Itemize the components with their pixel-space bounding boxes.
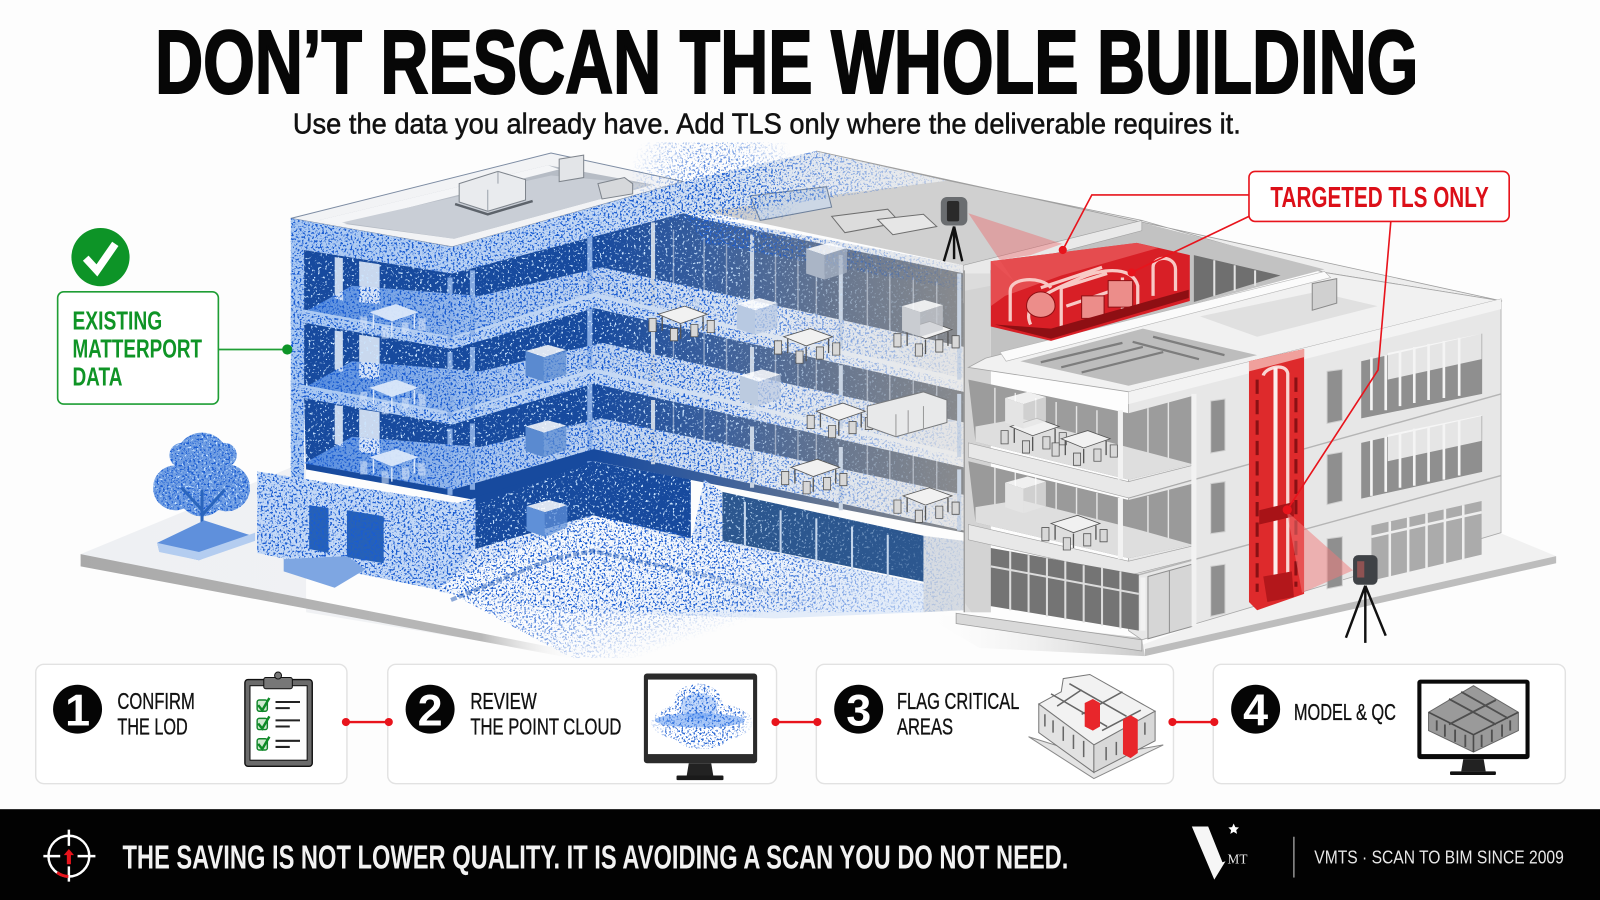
critical zone: red service riser — [1249, 349, 1304, 610]
callout: existing Matterport data — [58, 228, 292, 404]
connector 1-2 — [342, 718, 393, 726]
court wall behind red room — [991, 222, 1324, 357]
leader dots — [1059, 246, 1292, 514]
step 3 card — [816, 664, 1173, 784]
icon: rooftop laser scanner — [941, 197, 967, 261]
glazed ground floor — [991, 548, 1139, 631]
label box: MATTERPORT — [72, 336, 202, 364]
sparse white points on interiors — [296, 204, 969, 592]
window mullions — [673, 230, 937, 504]
balcony floor three — [968, 380, 1193, 480]
scan-to-BIM wing — [816, 151, 1502, 651]
icon: clipboard checklist — [245, 672, 312, 766]
step label: CONFIRM — [117, 688, 195, 714]
step number — [834, 685, 883, 736]
step label: REVIEW — [470, 688, 537, 714]
large windows — [1361, 334, 1482, 581]
step number — [406, 685, 455, 736]
step label: AREAS — [897, 714, 953, 740]
VMT logo — [1192, 823, 1247, 880]
balcony columns — [1120, 394, 1194, 631]
step label: THE LOD — [117, 714, 188, 740]
step 1 card — [36, 664, 347, 784]
slab lines — [1129, 394, 1501, 578]
ground point cloud — [438, 515, 872, 658]
step number: 1 — [65, 685, 90, 736]
plinth — [956, 613, 1142, 651]
balcony furniture — [1001, 392, 1117, 550]
building illustration — [81, 143, 1556, 663]
connector 3-4 — [1168, 718, 1218, 726]
icon: ground laser scanner — [1346, 555, 1386, 643]
tree — [149, 429, 365, 588]
icon: monitor with grey model — [1417, 680, 1530, 775]
connector — [218, 344, 292, 355]
podium and ground floor — [257, 461, 964, 618]
step label: FLAG CRITICAL — [897, 688, 1019, 714]
VMT logo: MT — [1228, 851, 1247, 866]
point-cloud wing: roofs — [291, 151, 1142, 571]
right roof — [968, 272, 1502, 392]
connector 2-3 — [771, 718, 821, 726]
icon: monitor with point cloud — [644, 673, 757, 780]
step number — [1231, 685, 1280, 736]
step number — [53, 685, 102, 736]
furniture and equipment — [360, 243, 959, 537]
label box — [58, 292, 218, 404]
point-cloud wing: floors — [291, 213, 964, 533]
left face glazing — [335, 257, 380, 454]
rooftop HVAC units — [455, 155, 937, 235]
ground slab — [81, 461, 1556, 659]
subtitle: Use the data you already have. Add TLS only where the deliverable requires it. — [293, 109, 1241, 141]
point cloud speckle overlay — [257, 151, 964, 612]
callout: targeted TLS only — [1059, 171, 1509, 514]
step number: 2 — [418, 685, 443, 736]
step 2 card — [388, 664, 777, 784]
step 4 card — [1213, 664, 1565, 784]
step label: THE POINT CLOUD — [470, 714, 621, 740]
scanner beam one — [968, 213, 1062, 282]
footer band — [0, 809, 1600, 900]
label box: EXISTING — [72, 308, 162, 336]
gray mid bay — [964, 273, 991, 612]
structural columns — [450, 231, 590, 516]
floor slabs — [291, 293, 964, 467]
step number: 3 — [846, 685, 871, 736]
balcony floor two — [968, 461, 1193, 558]
roof gravel texture — [342, 176, 653, 239]
takeaway message: THE SAVING IS NOT LOWER QUALITY. IT IS AVOIDING A SCAN YOU DO NOT NEED. — [122, 839, 1068, 876]
upper fascia — [963, 220, 1142, 303]
entrance steps — [284, 556, 365, 588]
icon: isometric building with red zones — [1029, 674, 1163, 779]
label box: DATA — [72, 364, 122, 392]
step label: MODEL & QC — [1294, 699, 1396, 725]
step number: 4 — [1243, 685, 1268, 736]
leader lines — [1063, 195, 1391, 510]
critical zone: red plant room — [991, 243, 1190, 341]
right facade wall — [1129, 299, 1501, 640]
tagline: VMTS · SCAN TO BIM SINCE 2009 — [1314, 846, 1564, 867]
back roof parapet — [816, 151, 1502, 301]
icon: target reticle — [43, 830, 95, 882]
flyaway points above roof — [633, 143, 806, 219]
planter — [157, 520, 255, 560]
scanner beam two — [1287, 511, 1353, 593]
label box — [1249, 171, 1509, 221]
slot windows — [1211, 369, 1342, 616]
label box: TARGETED TLS ONLY — [1270, 182, 1489, 214]
icon: green check — [71, 228, 130, 286]
